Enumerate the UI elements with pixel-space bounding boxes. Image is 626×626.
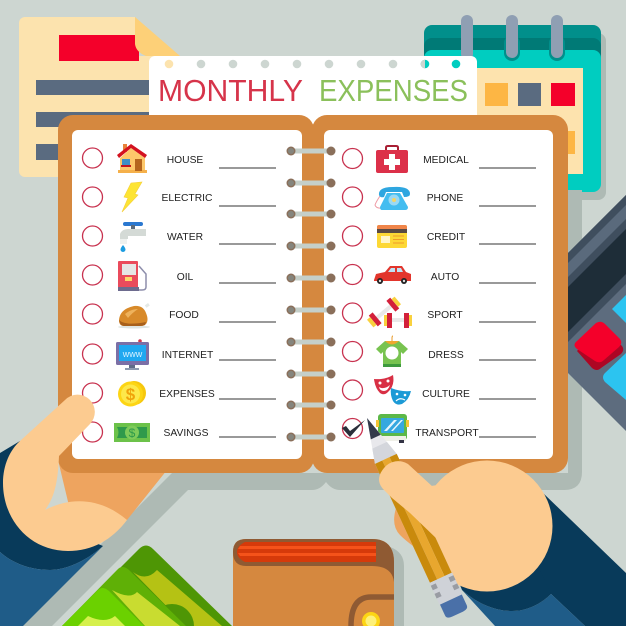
money bills [62, 546, 232, 626]
row: sport [342, 295, 536, 329]
title: monthly expenses: MONTHLY [158, 74, 303, 108]
calendar [424, 15, 606, 200]
label: transport: TRANSPORT [415, 428, 479, 439]
pencil ferrule [429, 573, 462, 605]
blue key lower [603, 353, 626, 400]
icon: house [117, 144, 147, 173]
icon: bus [376, 414, 409, 443]
wallet button [362, 612, 380, 626]
icon: checkmark [342, 420, 365, 437]
title paper [149, 56, 477, 126]
icon: theater masks [374, 375, 411, 405]
row: auto [342, 264, 536, 284]
notebook [58, 115, 568, 473]
row: food [82, 303, 276, 328]
icon: roast chicken [118, 303, 150, 328]
icon: monitor www: www [122, 349, 143, 359]
label: auto: AUTO [431, 272, 459, 283]
wallet [233, 539, 404, 626]
icon: faucet [120, 222, 146, 252]
label: oil: OIL [177, 272, 194, 283]
row: house [82, 144, 276, 173]
row: credit [342, 225, 536, 248]
right hand sleeve [450, 493, 626, 626]
icon: t-shirt [376, 336, 408, 367]
icon: lightning bolt [122, 182, 142, 212]
label: food: FOOD [169, 310, 199, 321]
row: expenses [82, 381, 276, 406]
icon: telephone [375, 187, 410, 210]
label: water: WATER [167, 232, 203, 243]
pencil lead [362, 416, 381, 439]
right index finger [379, 461, 470, 540]
left hand sleeve [0, 441, 103, 626]
icon: banknote [114, 423, 150, 442]
title: monthly expenses: EXPENSES [319, 74, 468, 108]
row: phone [342, 187, 536, 210]
label: internet: INTERNET [162, 350, 214, 361]
icon: dumbbells [366, 295, 412, 329]
red key [574, 322, 623, 370]
left page [72, 130, 302, 459]
spiral rings [286, 146, 336, 442]
label: credit: CREDIT [427, 232, 466, 243]
calculator [568, 195, 626, 431]
blue key upper [612, 295, 626, 323]
row: savings [82, 422, 276, 442]
icon: fuel pump [118, 261, 146, 291]
right page [324, 130, 553, 459]
icon: monitor www [116, 339, 149, 370]
label: electric: ELECTRIC [162, 193, 213, 204]
row: dress [342, 336, 536, 367]
icon: car [374, 266, 411, 284]
row: transport [342, 414, 536, 443]
icon: coins: $ [126, 385, 136, 404]
row: electric [82, 182, 276, 212]
row: internet [82, 339, 276, 370]
label: culture: CULTURE [422, 389, 470, 400]
notebook shadow [19, 190, 582, 626]
icon: credit card [377, 225, 407, 248]
label: medical: MEDICAL [423, 155, 469, 166]
icon: banknote: $ [129, 426, 136, 440]
pencil eraser [440, 595, 468, 619]
row: oil [82, 261, 276, 291]
label: savings: SAVINGS [163, 428, 209, 439]
row: water [82, 222, 276, 252]
pencil [356, 413, 469, 619]
left hand [3, 395, 127, 551]
label: expenses: EXPENSES [159, 389, 215, 400]
document sheet [19, 10, 185, 177]
icon: first aid kit [376, 146, 408, 173]
label: sport: SPORT [427, 310, 463, 321]
label: house: HOUSE [167, 155, 203, 166]
row: medical [342, 146, 536, 173]
title: monthly expenses [158, 74, 468, 108]
label: dress: DRESS [428, 350, 464, 361]
right hand palm [394, 460, 552, 592]
icon: coins [118, 381, 146, 406]
left palm [58, 460, 175, 520]
row: culture [342, 375, 536, 405]
label: phone: PHONE [427, 193, 463, 204]
